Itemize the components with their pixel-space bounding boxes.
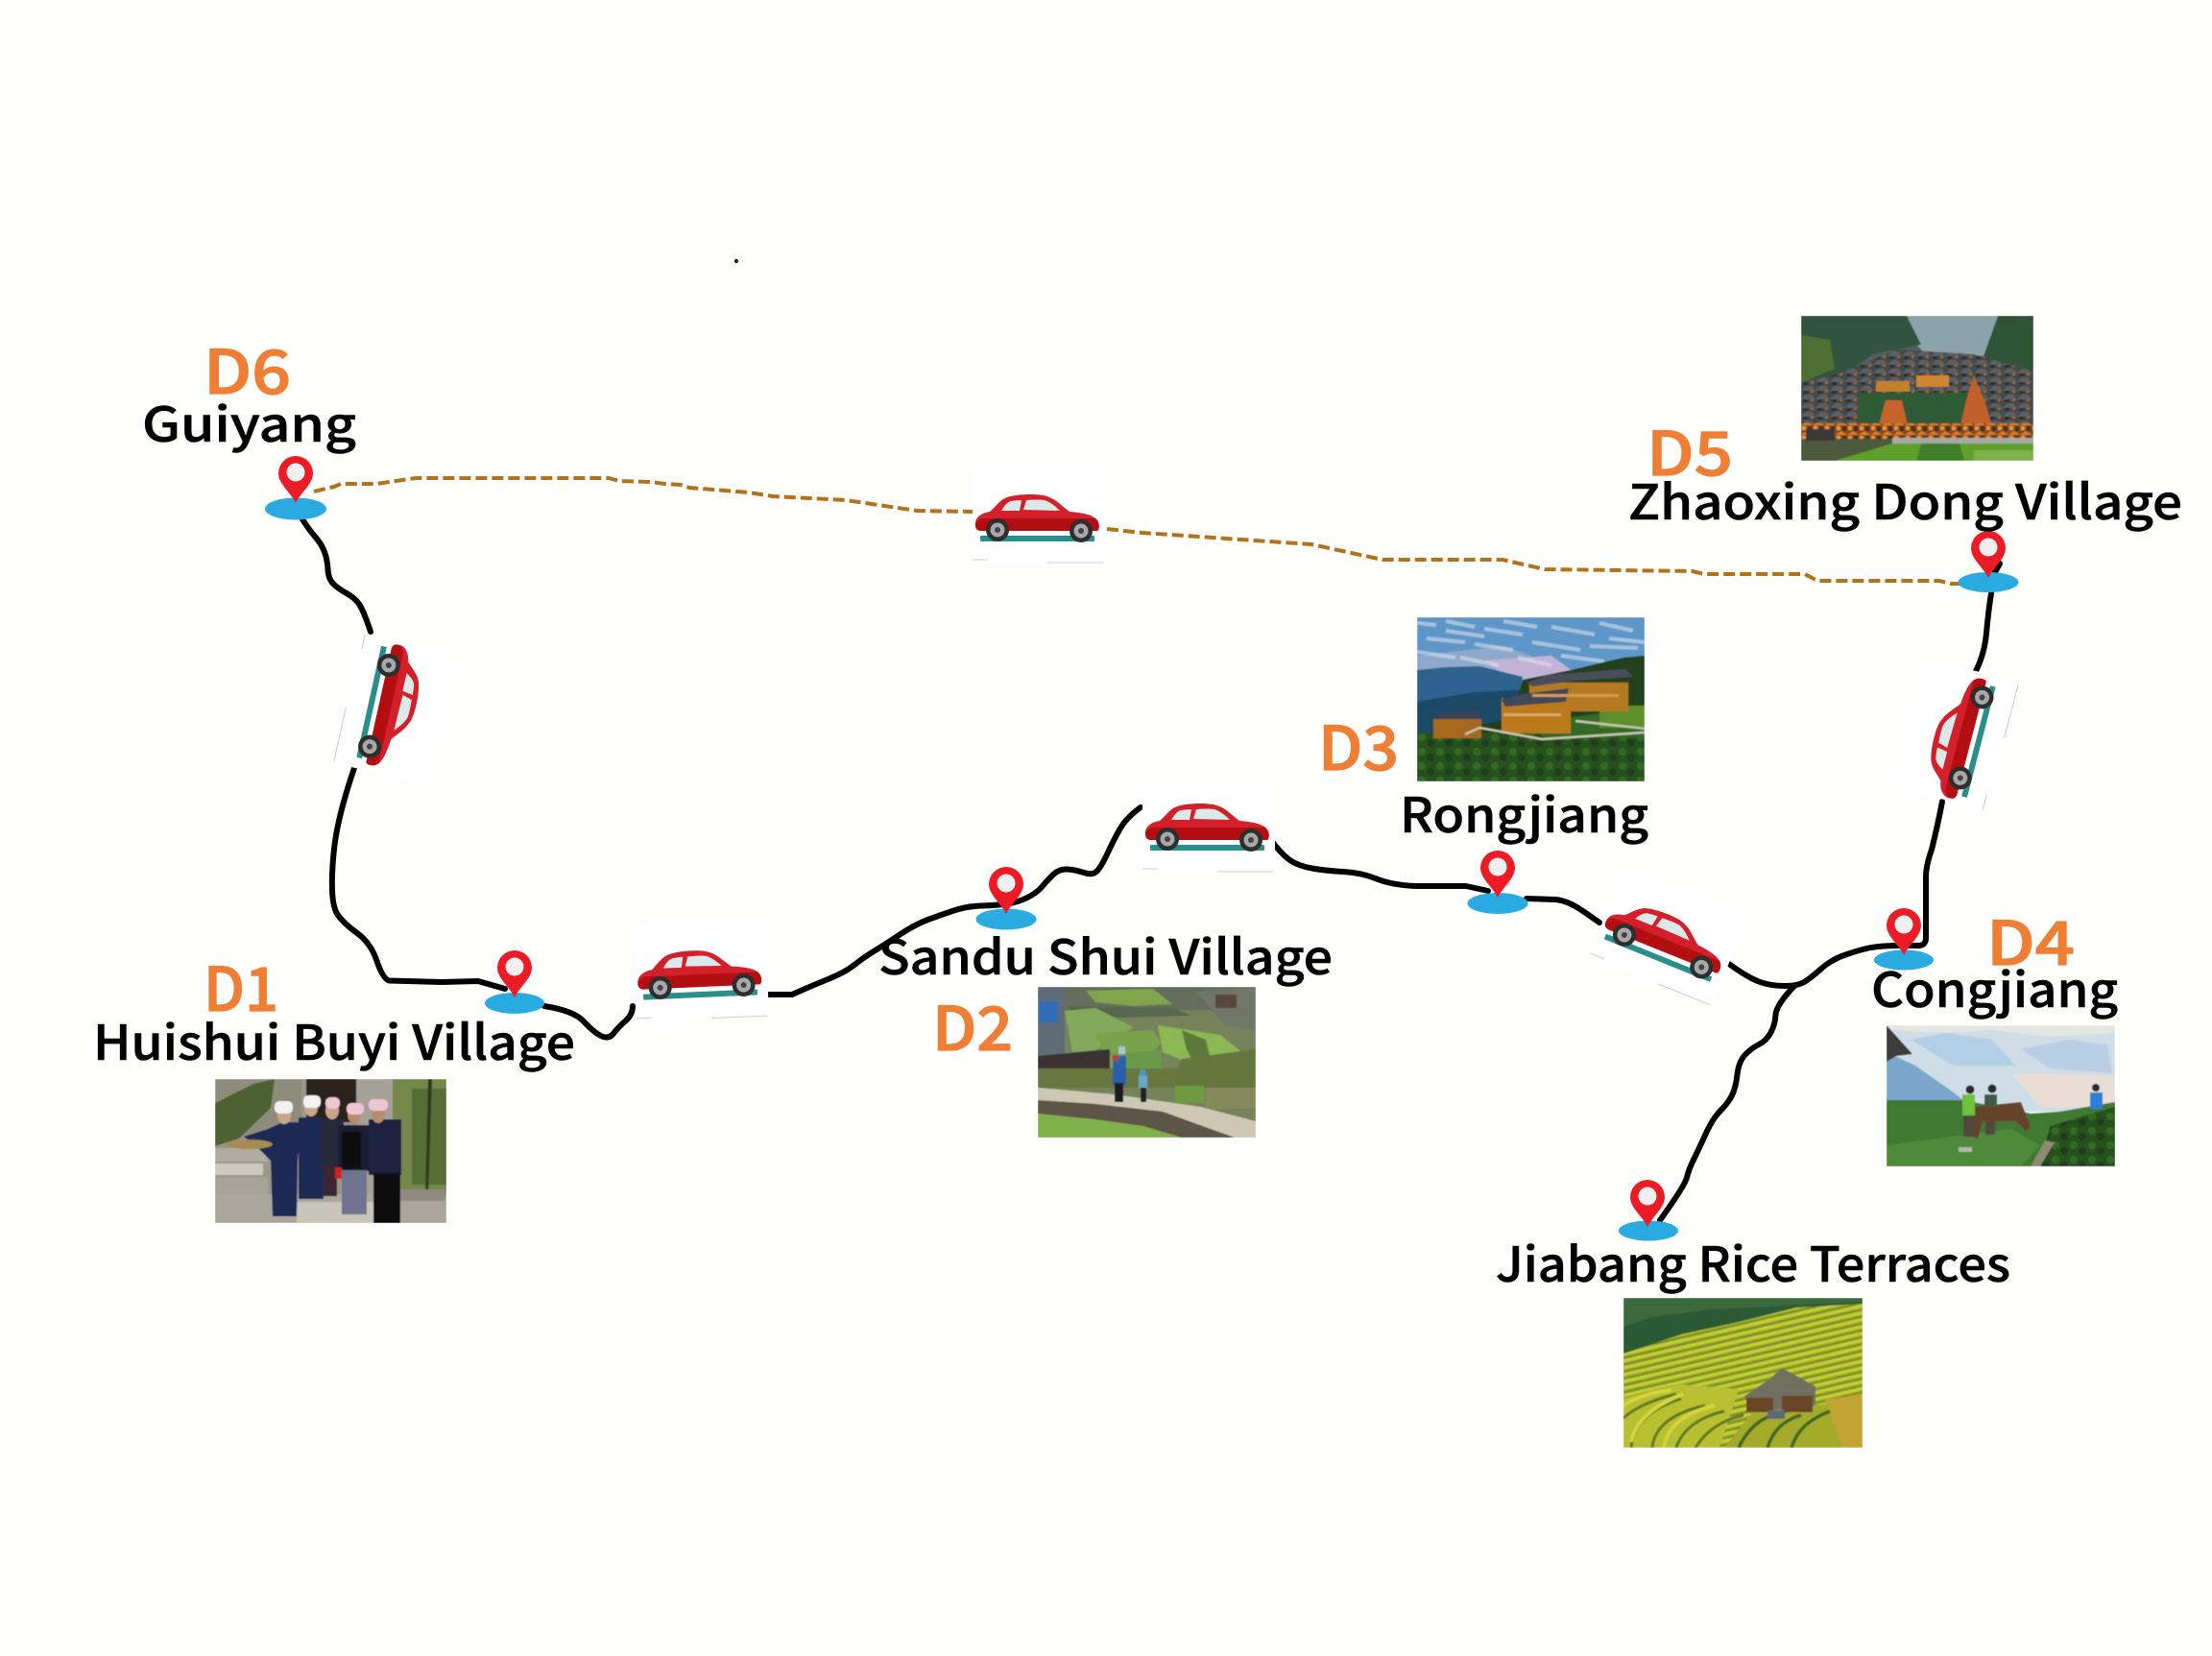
car: return leg	[973, 468, 1105, 564]
place name Guiyang: Guiyang	[142, 387, 356, 456]
day label D4: D4	[1986, 896, 2075, 983]
marker: Huishui Buyi Village	[485, 950, 544, 1014]
day label D1: D1	[204, 942, 278, 1029]
photo: Zhaoxing Dong Village	[1801, 316, 2033, 461]
marker: Sandu Shui Village	[975, 867, 1037, 929]
place name Jiabang Rice Terraces: Jiabang Rice Terraces	[1496, 1227, 2010, 1296]
photo: Sandu terraces	[1038, 987, 1256, 1138]
route: dashed return road	[314, 478, 1965, 584]
marker: Jiabang Rice Terraces	[1619, 1180, 1678, 1240]
photo: Rongjiang lodges	[1417, 617, 1645, 781]
car: Zhaoxing leg	[1893, 659, 2020, 810]
day label D5: D5	[1647, 406, 1733, 493]
day label D2: D2	[932, 981, 1013, 1068]
stray dot	[734, 259, 738, 263]
place name Huishui Buyi Village: Huishui Buyi Village	[93, 1005, 575, 1074]
marker: Congjiang	[1874, 908, 1934, 970]
place name Congjiang: Congjiang	[1871, 952, 2118, 1021]
car: Sandu leg	[1142, 777, 1275, 873]
day label D3: D3	[1318, 701, 1399, 788]
route: black roads	[302, 519, 2000, 1220]
day label D6: D6	[204, 324, 291, 412]
place name Rongjiang: Rongjiang	[1400, 778, 1648, 847]
marker: Zhaoxing Dong Village	[1959, 531, 2018, 592]
car: Rongjiang leg	[1589, 868, 1747, 1006]
photo: Congjiang herders	[1887, 1025, 2115, 1166]
place name Zhaoxing Dong Village: Zhaoxing Dong Village	[1628, 465, 2182, 534]
photo: Huishui Buyi women	[215, 1079, 446, 1223]
photo: Jiabang rice terraces	[1623, 1298, 1863, 1448]
car: Huishui leg	[633, 921, 769, 1022]
car: Guiyang leg	[332, 634, 455, 783]
marker: Guiyang	[265, 456, 326, 520]
place name Sandu Shui Village: Sandu Shui Village	[878, 920, 1333, 989]
marker: Rongjiang	[1467, 851, 1528, 914]
